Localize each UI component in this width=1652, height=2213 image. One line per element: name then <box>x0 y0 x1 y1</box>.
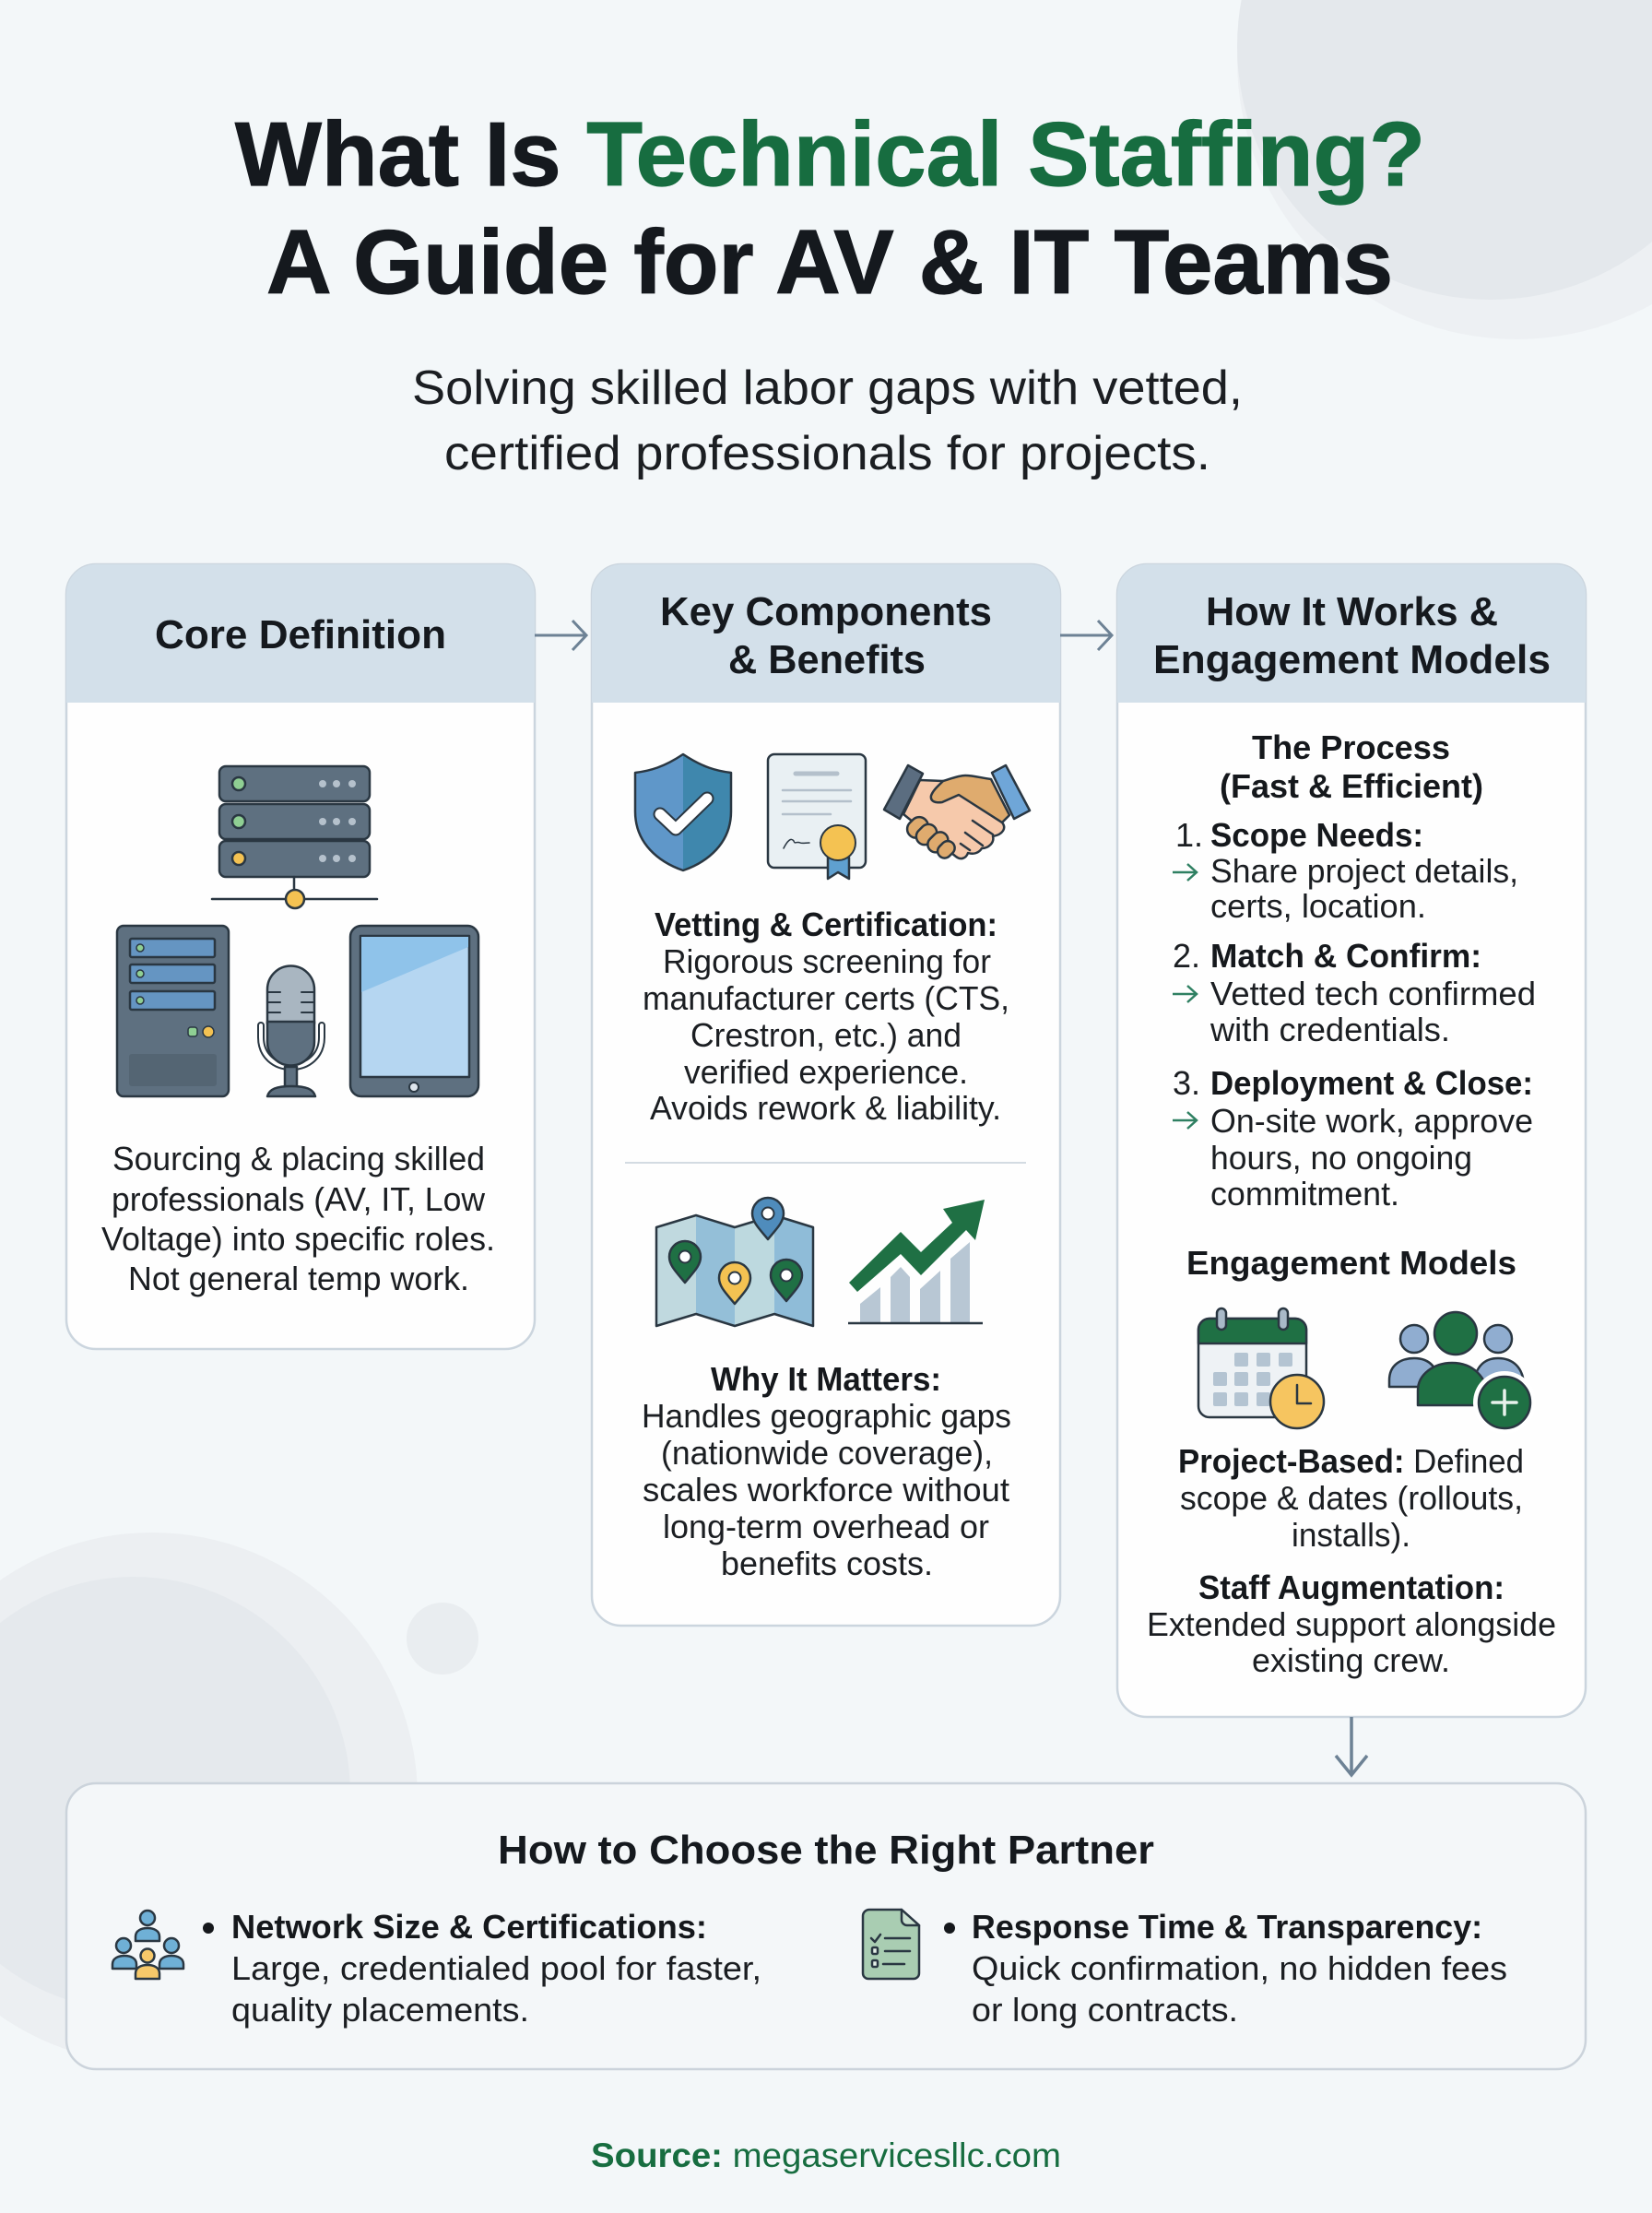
text: staff augmentation: Extended support alongside <box>1147 1605 1556 1643</box>
text: vetting and certification: Rigorous screening for <box>663 942 991 980</box>
header: core definition: Core Definition <box>155 612 446 657</box>
text: staff augmentation <box>1147 1568 1556 1679</box>
text: vetting and certification: manufacturer certs (CTS, <box>643 979 1009 1017</box>
icon: handshake <box>884 765 1030 861</box>
text: staff augmentation: Staff Augmentation: <box>1198 1568 1504 1606</box>
text: vetting and certification <box>643 905 1009 1127</box>
text: network size and certifications <box>203 1908 761 2029</box>
step 3: deployment and close <box>1173 1064 1533 1213</box>
panel: how it works and engagement models <box>1117 564 1586 1717</box>
header: how it works <box>1117 564 1586 703</box>
header: key components: & Benefits <box>728 637 926 682</box>
header: core definition <box>66 564 535 703</box>
icon: calendar with clock <box>1198 1308 1324 1428</box>
heading: engagement models: Engagement Models <box>1186 1244 1516 1282</box>
step 3: deployment and close: hours, no ongoing <box>1210 1139 1472 1177</box>
icon: checklist document <box>863 1910 919 1979</box>
heading: how to choose: How to Choose the Right Partner <box>498 1828 1154 1873</box>
text: staff augmentation: existing crew. <box>1252 1641 1450 1679</box>
text: why it matters: Handles geographic gaps <box>642 1397 1011 1435</box>
text: why it matters: scales workforce without <box>643 1471 1009 1509</box>
arrow: how it works to partner panel <box>1336 1717 1367 1775</box>
text: response time and transparency <box>944 1908 1507 2029</box>
text: response time and transparency: Quick confirmation, no hidden fees <box>972 1949 1507 1987</box>
text: why it matters: (nationwide coverage), <box>661 1434 993 1472</box>
text: why it matters: benefits costs. <box>721 1544 933 1582</box>
text: network size and certifications: quality placements. <box>231 1991 529 2029</box>
step 2: match and confirm: Vetted tech confirmed <box>1210 975 1536 1012</box>
text: response time and transparency: Response Time & Transparency: <box>972 1908 1482 1946</box>
icon: computer tower <box>117 926 229 1096</box>
subtitle <box>412 361 1243 480</box>
text: project-based: installs). <box>1292 1516 1410 1554</box>
source line: Source: megaservicesllc.com <box>591 2136 1061 2174</box>
step 3: deployment and close: On-site work, approve <box>1210 1102 1533 1140</box>
text: vetting and certification: verified experience. <box>684 1053 968 1091</box>
subtitle: Solving skilled labor gaps with vetted, <box>412 361 1243 415</box>
text: definition <box>101 1140 495 1297</box>
text: why it matters: Why It Matters: <box>711 1360 941 1398</box>
step 1: scope needs: 1. <box>1175 816 1203 854</box>
icon: growth chart <box>848 1200 985 1323</box>
step 1: scope needs: Share project details, <box>1210 852 1518 890</box>
arrow: key components to how it works <box>1060 621 1112 650</box>
panel: core definition <box>66 564 535 1349</box>
step 1: scope needs: Scope Needs: <box>1210 816 1423 854</box>
text: definition: Voltage) into specific roles. <box>101 1220 495 1258</box>
icon: shield <box>635 754 731 870</box>
header: key components <box>592 564 1060 703</box>
text: project-based: scope & dates (rollouts, <box>1180 1479 1523 1517</box>
text: response time and transparency: or long contracts. <box>972 1991 1238 2029</box>
title <box>235 103 1425 313</box>
icon: tablet <box>350 926 478 1096</box>
title: What Is Technical Staffing? <box>235 103 1425 205</box>
step 2: match and confirm: 2. <box>1173 937 1200 975</box>
heading: the process: The Process <box>1252 728 1450 766</box>
text: vetting and certification: Crestron, etc.) and <box>690 1016 962 1054</box>
text: why it matters: long-term overhead or <box>663 1508 989 1545</box>
text: vetting and certification: Avoids rework & liability. <box>650 1089 1001 1127</box>
icon: network of people <box>112 1911 183 1979</box>
text: vetting and certification: Vetting & Certification: <box>655 905 997 943</box>
text: definition: Sourcing & placing skilled <box>112 1140 485 1178</box>
heading: the process <box>1220 728 1483 805</box>
step 3: deployment and close: commitment. <box>1210 1175 1399 1213</box>
header: how it works: How It Works & <box>1206 589 1498 634</box>
subtitle: certified professionals for projects. <box>444 427 1210 480</box>
text: definition: professionals (AV, IT, Low <box>112 1180 486 1218</box>
step 3: deployment and close: Deployment & Close: <box>1210 1064 1533 1102</box>
heading: the process: (Fast & Efficient) <box>1220 767 1483 805</box>
header: key components: Key Components <box>660 589 992 634</box>
icon: microphone <box>261 966 322 1096</box>
title: A Guide for AV & IT Teams <box>266 211 1393 313</box>
text: network size and certifications: Network Size & Certifications: <box>231 1908 707 1946</box>
step 2: match and confirm <box>1173 937 1536 1048</box>
text: why it matters <box>642 1360 1011 1582</box>
text: network size and certifications: Large, credentialed pool for faster, <box>231 1949 761 1987</box>
text: project-based <box>1178 1442 1524 1554</box>
icon: server rack <box>212 766 377 908</box>
icon: certificate <box>768 754 866 879</box>
step 3: deployment and close: 3. <box>1173 1064 1200 1102</box>
text: project-based: Project-Based: Defined <box>1178 1442 1524 1480</box>
panel: how to choose the right partner <box>66 1783 1586 2069</box>
panel: key components and benefits <box>592 564 1060 1626</box>
step 1: scope needs: certs, location. <box>1210 887 1426 925</box>
step 1: scope needs <box>1173 816 1518 925</box>
icon: team with plus <box>1389 1312 1536 1434</box>
arrow: core definition to key components <box>535 621 586 650</box>
header: how it works: Engagement Models <box>1153 637 1551 682</box>
step 2: match and confirm: with credentials. <box>1210 1011 1450 1048</box>
icon: map with pins <box>656 1198 813 1326</box>
step 2: match and confirm: Match & Confirm: <box>1210 937 1481 975</box>
text: definition: Not general temp work. <box>128 1260 469 1297</box>
